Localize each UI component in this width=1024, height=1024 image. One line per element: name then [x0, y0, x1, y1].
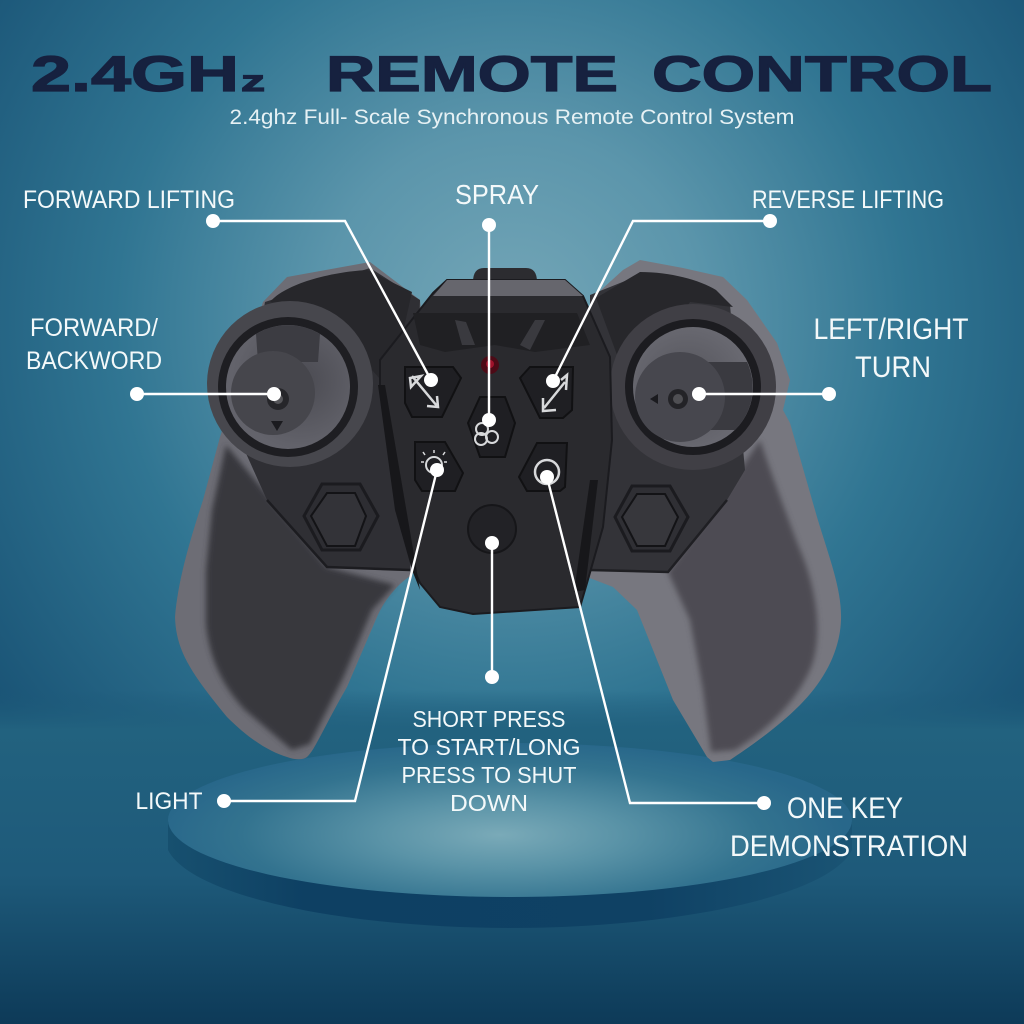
podium — [168, 743, 852, 928]
right joystick — [610, 304, 776, 470]
label: forward/backword — [26, 314, 162, 375]
label: forward/backword: FORWARD/ — [30, 314, 158, 342]
label: power button: PRESS TO SHUT — [402, 762, 576, 788]
right shoulder — [596, 272, 733, 390]
title — [31, 46, 992, 102]
title: 2.4GH — [31, 46, 239, 102]
left shoulder — [270, 270, 412, 390]
subtitle: 2.4ghz Full- Scale Synchronous Remote Control System — [230, 105, 794, 129]
label: one key demonstration: ONE KEY — [787, 792, 903, 825]
title: REMOTE — [326, 46, 618, 102]
label: power button: TO START/LONG — [398, 734, 580, 760]
label: light: LIGHT — [136, 788, 203, 815]
label: power button: SHORT PRESS — [412, 706, 566, 732]
label: left/right turn — [814, 313, 968, 384]
right grip — [587, 260, 841, 762]
right hexagon button — [615, 486, 688, 551]
spray button — [468, 397, 515, 457]
label: one key demonstration: DEMONSTRATION — [730, 830, 968, 863]
title: CONTROL — [652, 46, 992, 102]
demonstration button — [519, 443, 567, 491]
label: left/right turn: TURN — [855, 351, 931, 384]
light button — [415, 442, 463, 491]
left grip — [175, 262, 440, 759]
label: power button — [398, 706, 580, 816]
label: power button: DOWN — [450, 790, 528, 816]
label: forward/backword: BACKWORD — [26, 347, 162, 375]
label: left/right turn: LEFT/RIGHT — [814, 313, 968, 346]
callout dots — [130, 214, 836, 810]
forward lifting button — [405, 367, 461, 417]
controller — [175, 260, 841, 762]
label: reverse lifting: REVERSE LIFTING — [752, 186, 944, 214]
indicator light — [481, 356, 499, 374]
callout lines — [137, 221, 829, 803]
label: one key demonstration — [730, 792, 968, 863]
title: z — [241, 65, 265, 98]
centre console — [378, 268, 612, 614]
label: forward lifting: FORWARD LIFTING — [23, 186, 235, 214]
reverse lifting button — [520, 367, 573, 418]
left hexagon button — [304, 484, 378, 550]
power button — [468, 505, 516, 553]
left joystick — [207, 301, 373, 467]
label: spray: SPRAY — [455, 179, 539, 210]
